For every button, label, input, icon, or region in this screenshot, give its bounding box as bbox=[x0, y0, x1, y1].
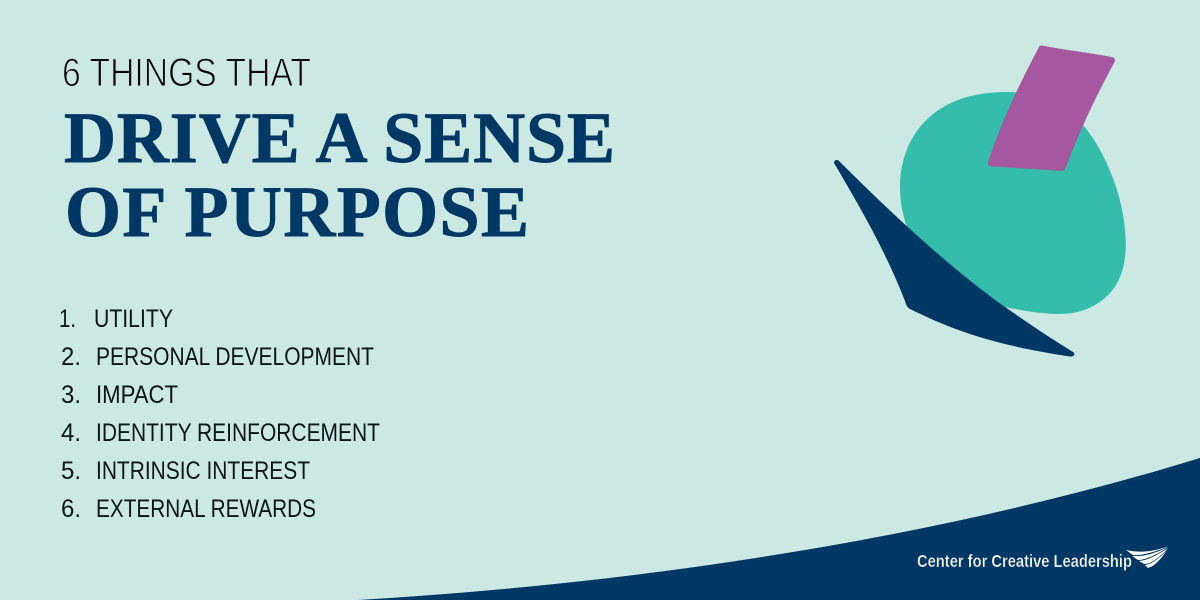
list item 6: EXTERNAL REWARDS bbox=[96, 495, 316, 523]
list item 5: INTRINSIC INTEREST bbox=[96, 457, 310, 485]
teal blob bbox=[900, 92, 1126, 314]
list item 1: UTILITY bbox=[94, 305, 173, 333]
logo wing icon bbox=[1126, 546, 1169, 568]
list item 3: IMPACT bbox=[96, 381, 178, 409]
heading: line two: OF PURPOSE bbox=[65, 172, 529, 252]
list item 2: 2. bbox=[61, 343, 81, 371]
list item 3: 3. bbox=[61, 381, 81, 409]
bottom navy curved band bbox=[358, 458, 1200, 600]
list item 4: IDENTITY REINFORCEMENT bbox=[96, 419, 380, 447]
list item 1: 1. bbox=[59, 305, 76, 333]
purple parallelogram bbox=[988, 46, 1115, 171]
logo wordmark: Center for Creative Leadership bbox=[917, 551, 1132, 571]
list item 5: 5. bbox=[61, 457, 81, 485]
list item 4: 4. bbox=[61, 419, 81, 447]
navy swoosh bbox=[834, 160, 1074, 357]
abstract shapes illustration bbox=[834, 46, 1126, 357]
numbered list of six drivers bbox=[59, 305, 380, 523]
heading: line one: DRIVE A SENSE bbox=[64, 98, 615, 178]
list item 1 bbox=[59, 305, 173, 333]
logo: Center for Creative Leadership bbox=[917, 546, 1169, 571]
list item 6: 6. bbox=[61, 495, 81, 523]
list item 2: PERSONAL DEVELOPMENT bbox=[96, 343, 374, 371]
heading bbox=[62, 51, 615, 252]
heading: kicker: 6 THINGS THAT bbox=[62, 51, 311, 95]
list item 3 bbox=[61, 381, 178, 409]
